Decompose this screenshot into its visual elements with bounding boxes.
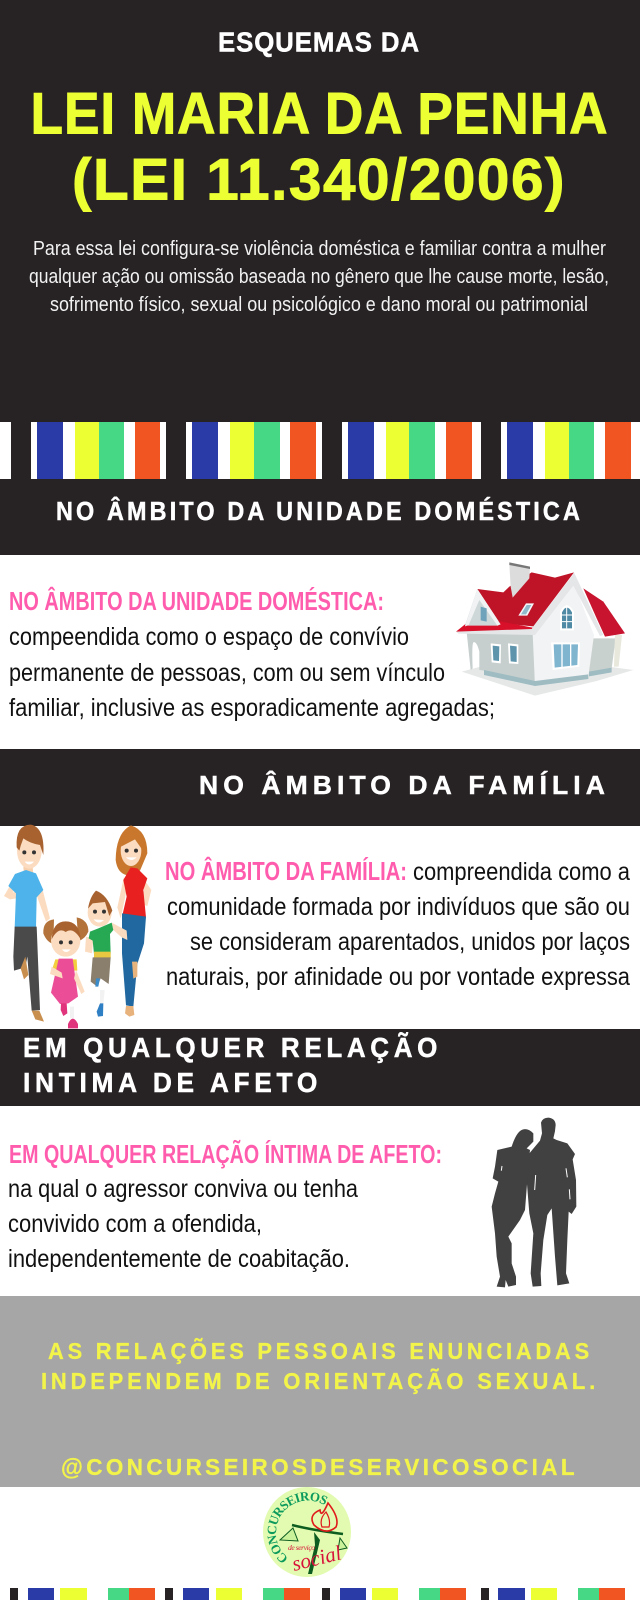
panel: header <box>0 0 640 555</box>
heading: esquemas da: ESQUEMAS DA <box>218 26 420 58</box>
panel: band familia <box>0 749 640 826</box>
panel: familia text <box>165 856 630 991</box>
panel: relacao de afeto text: na qual o agressor conviva ou tenha <box>8 1175 358 1203</box>
handle: @CONCURSEIROSDESERVICOSOCIAL <box>61 1454 578 1480</box>
logo <box>263 1487 351 1577</box>
logo: CONCURSEIROS <box>268 1492 328 1562</box>
panel: relacao de afeto text <box>8 1139 442 1273</box>
boy <box>85 891 127 1017</box>
panel: band relacao de afeto <box>0 1029 640 1106</box>
note line 1: AS RELAÇÕES PESSOAIS ENUNCIADAS <box>48 1337 593 1364</box>
icon: family <box>4 825 151 1028</box>
panel: unidade domestica text: compeendida como o espaço de convívio <box>9 623 409 651</box>
panel: unidade domestica text: NO ÂMBITO DA UNIDADE DOMÉSTICA: <box>9 586 384 616</box>
logo: social <box>289 1540 344 1576</box>
band heading line 1: EM QUALQUER RELAÇÃO <box>23 1032 442 1063</box>
icon: house <box>456 562 633 696</box>
decorative colour strip bottom <box>10 1588 625 1600</box>
intro paragraph <box>29 237 609 316</box>
band heading: unidade domestica: NO ÂMBITO DA UNIDADE DOMÉSTICA <box>56 496 583 526</box>
band heading line 2: INTIMA DE AFETO <box>23 1067 322 1098</box>
panel: unidade domestica text <box>9 586 495 722</box>
panel: orientation note <box>0 1296 640 1487</box>
note line 2: INDEPENDEM DE ORIENTAÇÃO SEXUAL. <box>41 1367 599 1394</box>
panel: relacao de afeto text: convivido com a ofendida, <box>8 1210 262 1238</box>
decorative colour strip top <box>0 422 640 479</box>
logo: de serviço <box>288 1543 315 1552</box>
panel: familia text: NO ÂMBITO DA FAMÍLIA: <box>165 856 407 886</box>
dad <box>4 825 50 1022</box>
icon: couple silhouette <box>492 1118 576 1287</box>
band heading: familia: NO ÂMBITO DA FAMÍLIA <box>199 770 610 800</box>
panel: unidade domestica text: familiar, inclusive as esporadicamente agregadas; <box>9 694 495 722</box>
girl <box>43 917 88 1028</box>
panel: relacao de afeto text: independentemente de coabitação. <box>8 1245 350 1273</box>
panel: relacao de afeto text: EM QUALQUER RELAÇÃO ÍNTIMA DE AFETO: <box>9 1139 442 1169</box>
mom <box>116 825 151 1017</box>
title line 2: (LEI 11.340/2006) <box>72 148 566 212</box>
panel: unidade domestica text: permanente de pessoas, com ou sem vínculo <box>9 659 445 687</box>
